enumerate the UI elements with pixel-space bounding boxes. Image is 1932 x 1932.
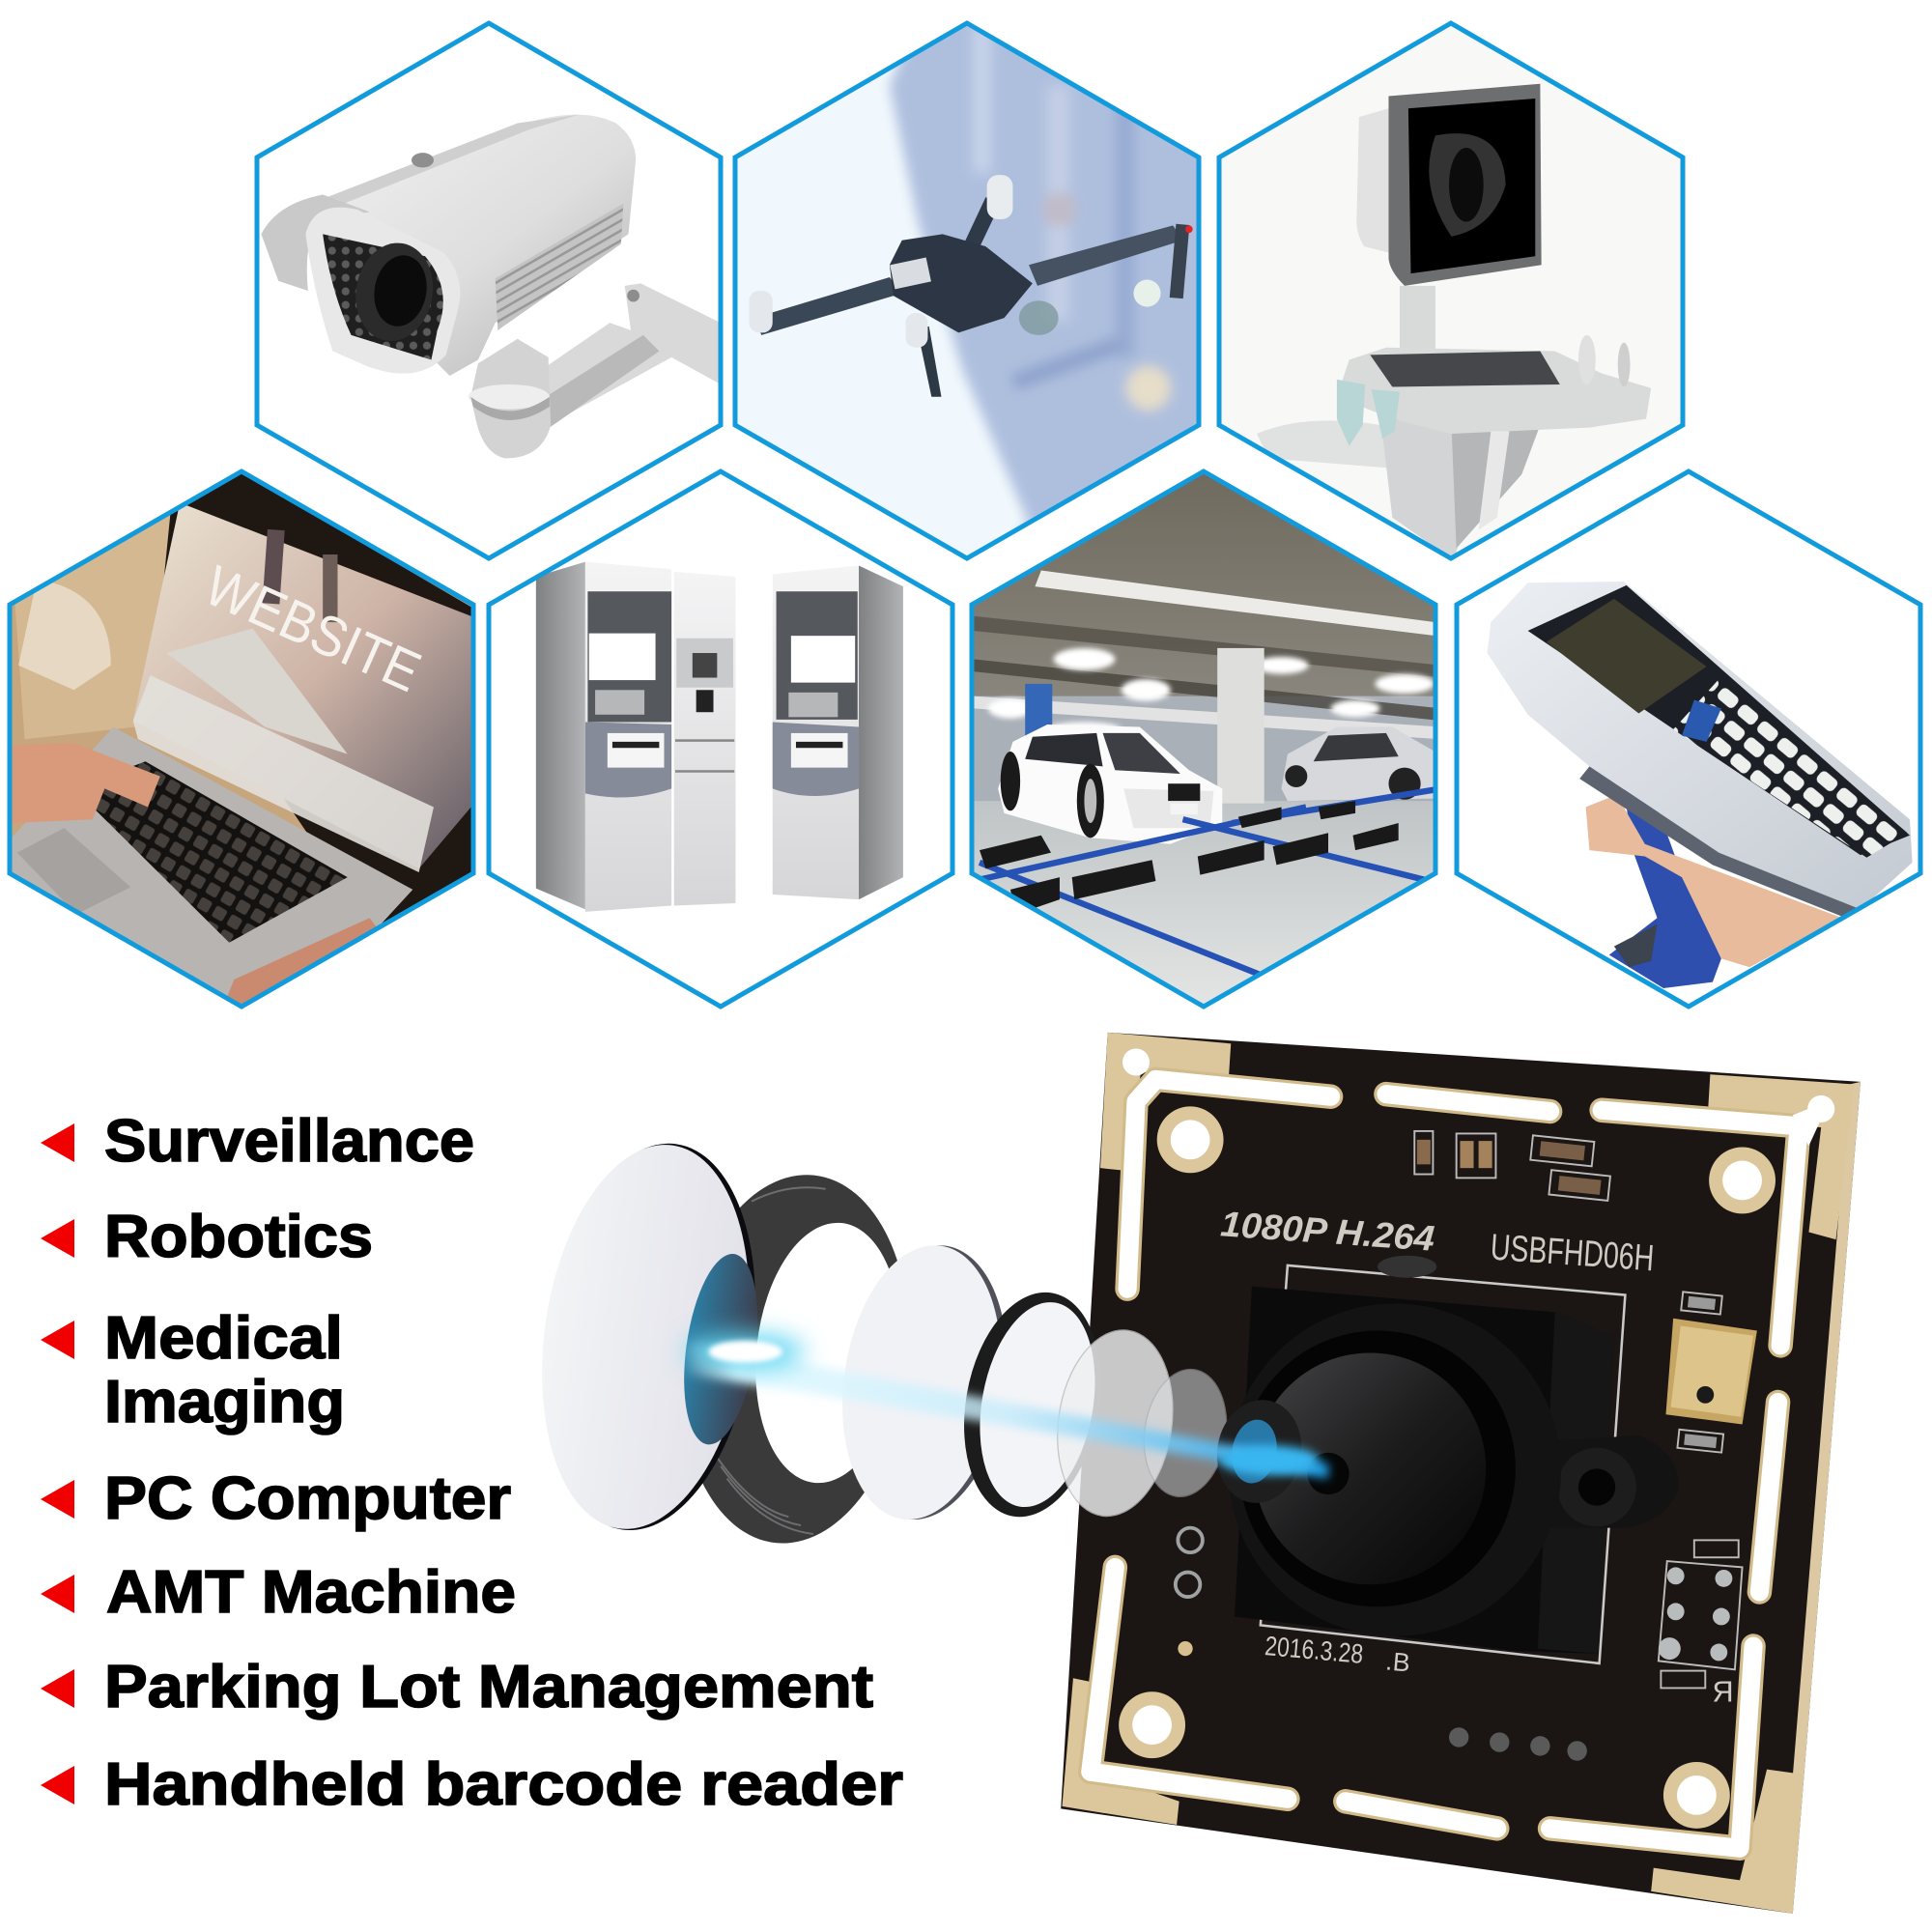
exploded lens assembly	[519, 1129, 1328, 1554]
board silkscreen: mirrored R: R	[1713, 1675, 1734, 1708]
board silkscreen: model: 1080P H.264	[1219, 1204, 1435, 1259]
icon: wall bracket	[469, 283, 721, 458]
solder pads	[1176, 1528, 1587, 1761]
icon: middle cabinet	[674, 572, 735, 905]
camera PCB board	[1061, 1033, 1861, 1914]
middle lens disc	[826, 1235, 1024, 1530]
hand	[1586, 795, 1842, 967]
list item: Surveillance: Surveillance	[104, 1108, 474, 1175]
blurred building band	[884, 26, 1196, 526]
application list	[41, 1108, 903, 1818]
icon: camera housing	[261, 115, 636, 376]
screen text: WEBSITE	[196, 554, 430, 704]
laptop screen	[133, 502, 487, 868]
ceiling lights	[988, 648, 1435, 737]
board silkscreen: part number: USBFHD06H	[1489, 1227, 1656, 1279]
ceiling beams	[974, 571, 1441, 739]
blue floor lines	[974, 788, 1441, 976]
small glass element	[1136, 1364, 1235, 1502]
mounting ear	[1540, 1435, 1679, 1528]
list item: Medical Imaging	[41, 1305, 345, 1435]
pin header	[1659, 1540, 1743, 1688]
glass element	[1046, 1322, 1184, 1523]
SMD components	[1414, 1131, 1723, 1453]
main car	[998, 724, 1222, 844]
columns	[1217, 648, 1264, 804]
light beam	[684, 1334, 1328, 1479]
board silkscreen: revision: .B	[1384, 1646, 1411, 1677]
parking bumpers	[980, 801, 1399, 914]
list item: Parking Lot Management: Parking Lot Management	[104, 1654, 873, 1720]
lens barrel	[1229, 1303, 1561, 1636]
top screw	[1378, 1256, 1436, 1278]
list item: PC Computer: PC Computer	[104, 1465, 511, 1532]
list item: Medical Imaging: Medical	[104, 1305, 343, 1372]
hexagon: surveillance camera	[257, 23, 721, 558]
background car	[1282, 727, 1439, 801]
icon: quadcopter	[750, 175, 1193, 397]
list item: Handheld barcode reader: Handheld barcode reader	[104, 1751, 903, 1818]
small lens	[1209, 1393, 1310, 1510]
hexagon: medical ultrasound	[1208, 13, 1700, 567]
laptop base	[0, 727, 412, 1010]
lens ring	[663, 1163, 926, 1554]
hexagon: ATM machines	[489, 471, 952, 1007]
microphone: 7011 0536	[1567, 1462, 1636, 1483]
list item: Medical Imaging: Imaging	[104, 1369, 345, 1435]
hexagon: PC laptop	[0, 469, 487, 1023]
mounting holes	[1119, 1106, 1776, 1829]
microphone	[1567, 1319, 1757, 1483]
icon: ultrasound machine	[1257, 84, 1651, 560]
black ring	[948, 1282, 1118, 1528]
corner slot ends	[1122, 1048, 1834, 1146]
hand	[10, 743, 160, 823]
hexagon: barcode scanner	[1457, 471, 1920, 1007]
list item: Robotics: Robotics	[104, 1204, 373, 1270]
board silkscreen: date: 2016.3.28	[1264, 1631, 1364, 1669]
icon: left ATM	[536, 562, 671, 912]
icon: scanner body	[1488, 582, 1913, 918]
hexagon: parking lot	[961, 462, 1448, 1023]
icon: scanner grip	[1609, 788, 1721, 988]
front lens disc	[519, 1129, 779, 1544]
hexagon: drone	[727, 13, 1220, 567]
camera module housing	[1229, 1256, 1679, 1663]
list item: AMT Machine: AMT Machine	[106, 1559, 516, 1626]
icon: right ATM	[773, 565, 903, 899]
gold corners	[1062, 1033, 1855, 1914]
board slots	[1091, 1079, 1799, 1848]
